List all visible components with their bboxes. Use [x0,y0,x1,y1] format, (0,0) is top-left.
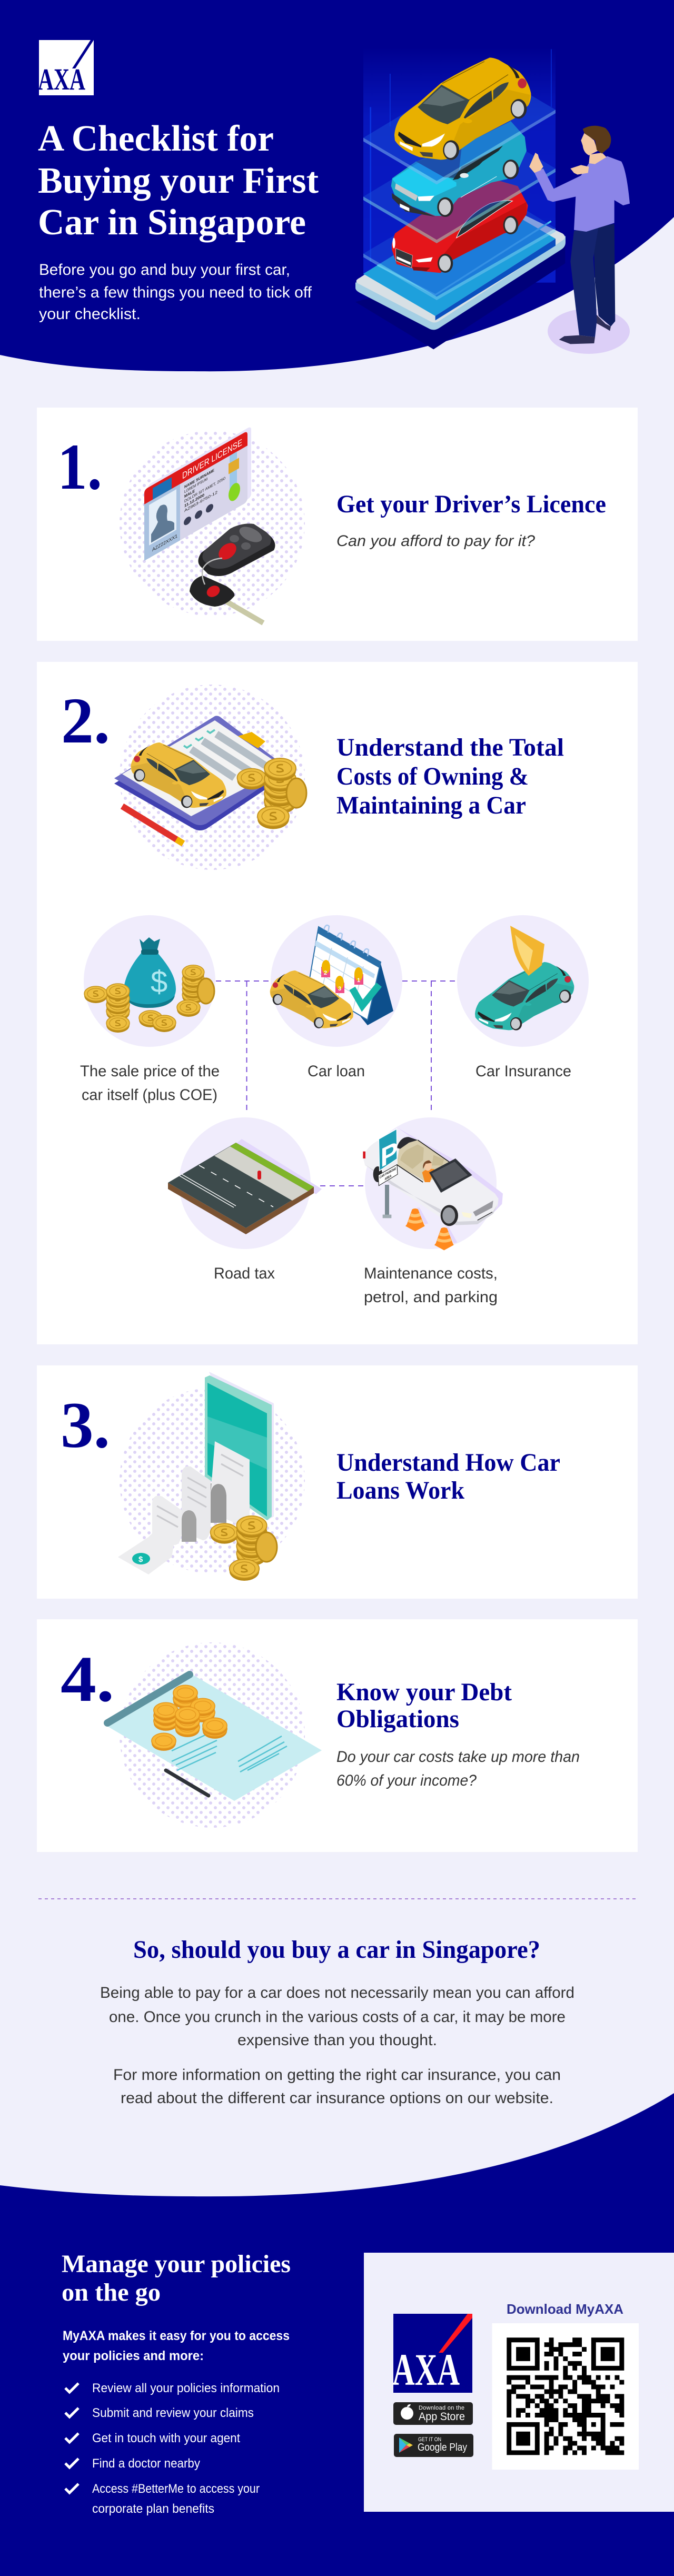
panel: download [364,2253,674,2512]
checklist: Submit and review your claims [92,2406,254,2420]
cost item: maintenance [363,1117,503,1306]
icon: convertible car [363,1128,503,1226]
footer navy curved background [0,2093,674,2576]
icon: driver licence card: LOREM IPSUM [184,477,207,494]
number 4: 4. [61,1643,114,1715]
footer intro: your policies and more: [63,2349,204,2363]
header navy curved background [0,0,674,371]
title [38,118,319,243]
cost item: car loan [270,915,402,1080]
App Store badge [393,2402,473,2425]
dotted circle [120,1388,305,1573]
icon: money bag: $ [151,965,167,999]
conclusion text: read about the different car insurance options on our website. [121,2089,553,2107]
download label: Download MyAXA [507,2301,623,2317]
icon: yellow car [270,970,353,1028]
QR code [492,2323,639,2470]
AXA logo white [38,40,94,96]
man figure [529,126,630,354]
number 2: 2. [61,685,110,757]
footer heading: Manage your policies [62,2250,291,2278]
intro text: there’s a few things you need to tick off [39,284,312,301]
platform 3 [363,183,556,300]
hair [583,126,611,154]
cost connectors [216,981,457,1186]
footer intro: MyAXA makes it easy for you to access [63,2329,290,2343]
App Store badge: App Store [419,2411,465,2423]
hands [529,153,543,173]
conclusion text [100,1984,574,2107]
conclusion text: expensive than you thought. [237,2032,437,2049]
conclusion text: one. Once you crunch in the various costs of a car, it may be more [109,2008,566,2026]
blue car [391,121,527,217]
icon: coins [84,965,214,1033]
icon: phone with receipt and coins: $ [138,1555,143,1564]
step 1 heading: Get your Driver’s Licence [336,490,606,518]
intro text [39,261,312,323]
checklist: Review all your policies information [92,2381,280,2395]
panel: step 4 [37,1619,638,1852]
yellow car [394,57,531,160]
cost item: road tax [168,1117,322,1282]
cost item: sale price [80,915,220,1104]
Google Play badge: GET IT ON [418,2436,441,2443]
back leg [593,224,615,326]
icon: driver licence card: MALE [184,488,195,499]
neck and face [589,153,607,164]
step 4 question [336,1748,580,1789]
icon: money bag [124,937,176,1008]
platform 1 [363,66,556,184]
step 2 heading: Understand the Total [336,734,564,761]
step 1 question: Can you afford to pay for it? [336,532,535,550]
dotted circle [120,1642,305,1828]
label: Maintenance costs, [364,1265,498,1282]
phone shadow [355,242,565,349]
panel: step 2 [37,662,638,1344]
icon: calendar: 2 [324,970,327,976]
floor circle [548,309,630,354]
icon: parking sign [378,1129,398,1218]
step 4 question: 60% of your income? [336,1772,477,1789]
dotted circle [120,685,305,870]
icon: calendar [309,925,393,1025]
step 2 heading: Maintaining a Car [336,791,526,819]
front leg [570,226,599,337]
App Store badge: Download on the [419,2405,464,2411]
checklist: Access #BetterMe to access your [92,2482,260,2496]
title: Car in Singapore [38,202,306,243]
conclusion text: For more information on getting the right car insurance, you can [113,2066,561,2084]
hero illustration: cars on phone platforms [355,47,566,349]
conclusion text: Being able to pay for a car does not necessarily mean you can afford [100,1984,574,2002]
phone [355,196,566,330]
intro text: Before you go and buy your first car, [39,261,290,279]
check items [65,2383,78,2493]
title: Buying your First [38,161,319,201]
title: A Checklist for [38,118,274,159]
icon: car keys [190,523,275,623]
step 2 heading: Costs of Owning & [336,762,529,790]
AXA logo blue: AXA [392,2344,460,2395]
icon: traffic cones [405,1207,457,1250]
icon: road [168,1139,322,1234]
step 4 heading [336,1678,512,1733]
step 3 heading: Loans Work [336,1477,464,1504]
label: Road tax [214,1265,275,1282]
footer heading: on the go [62,2278,161,2306]
icon: shield [510,926,544,976]
icon: driver licence card: AZ863-9750-12 [184,490,218,513]
label [80,1063,220,1104]
icon: parking sign: AREA [385,1174,391,1182]
dotted circle [120,431,305,616]
shirt [534,156,630,232]
icon: driver licence card [144,426,251,561]
panel: step 1 [37,408,638,641]
icon: driver licence card: NAME SURNAME [184,468,215,489]
panel: step 3 [37,1365,638,1599]
label: Car loan [308,1063,365,1080]
icon: parking sign: P [381,1135,398,1174]
checklist [65,2381,280,2516]
checklist: Find a doctor nearby [92,2456,200,2471]
AXA logo blue [392,2314,472,2395]
step 3 heading [336,1449,560,1504]
label [364,1265,498,1306]
step 4 question: Do your car costs take up more than [336,1748,580,1766]
step 3 heading: Understand How Car [336,1449,560,1477]
step 4 heading: Obligations [336,1705,459,1733]
Google Play badge [394,2434,473,2457]
footer heading [62,2250,291,2306]
icon: driver licence card: DRIVER LICENSE [182,437,242,481]
icon: calendar: 1 [357,977,360,984]
cost item: car insurance [457,915,589,1080]
icon: driver licence card: DOLOR SIT AMET, 2050 [184,475,225,503]
conclusion heading: So, should you buy a car in Singapore? [133,1936,540,1964]
checklist: corporate plan benefits [92,2502,214,2516]
step 2 heading [336,734,564,819]
icon: clipboard with car and coins [114,716,306,844]
number 3: 3. [61,1389,110,1461]
Google Play badge: Google Play [418,2442,467,2453]
AXA logo white: AXA [38,62,85,96]
icon: phone with receipt and coins [118,1372,277,1581]
footer intro [63,2329,290,2363]
checklist: Get in touch with your agent [92,2431,240,2445]
label: car itself (plus COE) [82,1086,217,1104]
label: Car Insurance [475,1063,571,1080]
intro text: your checklist. [39,305,141,323]
icon: calendar: 3 [338,986,341,992]
icon: teal car [475,962,574,1031]
icon: document with coins [105,1673,322,1801]
label: petrol, and parking [364,1289,498,1306]
red car [392,179,528,273]
icon: driver licence card: AZZ22XXX1 [152,533,177,553]
icon: driver licence card: 11.12.2000 [184,492,204,508]
label: The sale price of the [80,1063,220,1080]
icon: parking sign: CAR PARKING [380,1166,397,1180]
platform 2 [363,125,556,243]
number 1: 1. [57,431,102,503]
glow column [363,47,556,283]
step 4 heading: Know your Debt [336,1678,512,1706]
